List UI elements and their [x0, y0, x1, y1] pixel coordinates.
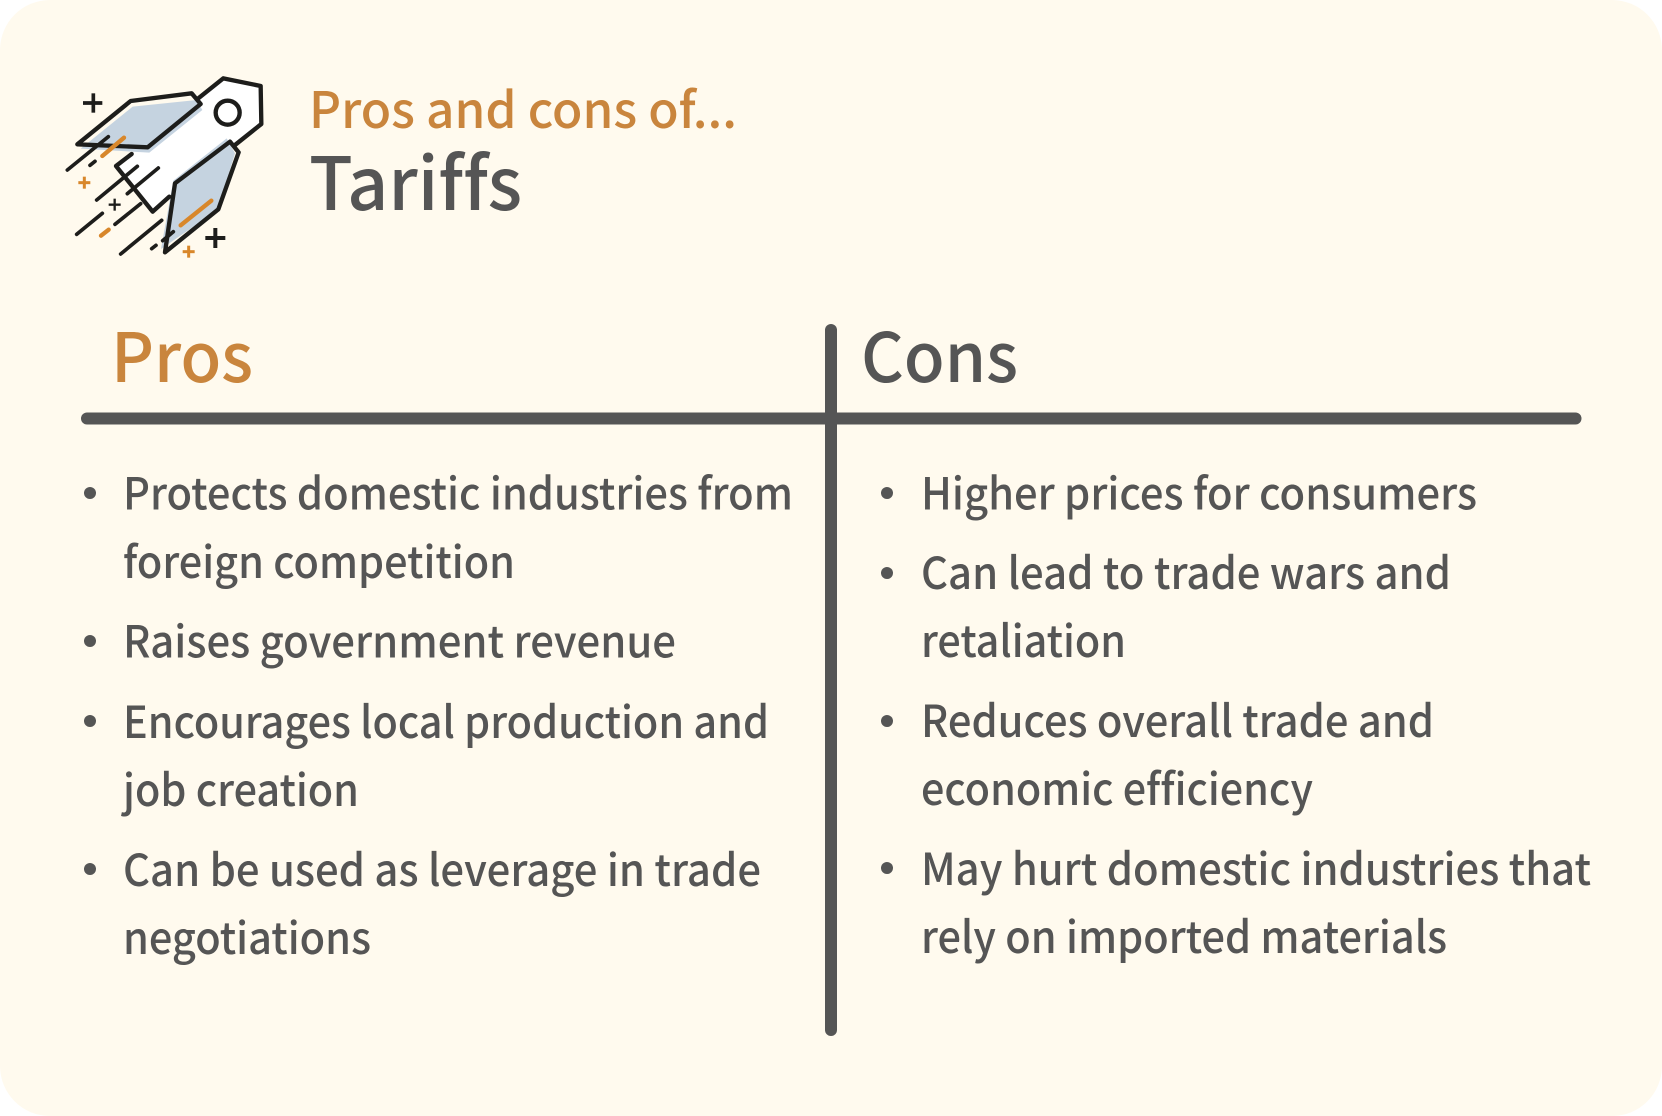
cons list: retaliation	[921, 606, 1126, 670]
cons list: economic efficiency	[921, 754, 1313, 818]
pros list: Protects domestic industries from	[123, 458, 793, 522]
title block	[309, 71, 737, 232]
pros list: Encourages local production and	[123, 687, 769, 751]
pros list	[84, 458, 793, 967]
pros list: Can be used as leverage in trade	[123, 835, 761, 899]
icon: rocket	[67, 78, 261, 258]
cons list: Can lead to trade wars and	[921, 538, 1451, 602]
main title: Tariffs	[309, 126, 522, 232]
cons list: Higher prices for consumers	[921, 458, 1477, 522]
pros list: negotiations	[123, 903, 371, 967]
panel: cons	[861, 303, 1591, 966]
table grid lines	[81, 324, 1582, 1036]
subtitle: Pros and cons of...	[309, 71, 737, 143]
cons heading: Cons	[861, 303, 1018, 402]
panel: pros	[84, 303, 793, 967]
cons list: May hurt domestic industries that	[921, 834, 1591, 898]
cons list	[881, 458, 1591, 966]
pros list: job creation	[120, 755, 359, 819]
pros list: foreign competition	[123, 527, 515, 591]
pros list: Raises government revenue	[123, 606, 676, 670]
pros heading: Pros	[111, 303, 253, 402]
cons list: Reduces overall trade and	[921, 686, 1434, 750]
cons list: rely on imported materials	[921, 902, 1447, 966]
